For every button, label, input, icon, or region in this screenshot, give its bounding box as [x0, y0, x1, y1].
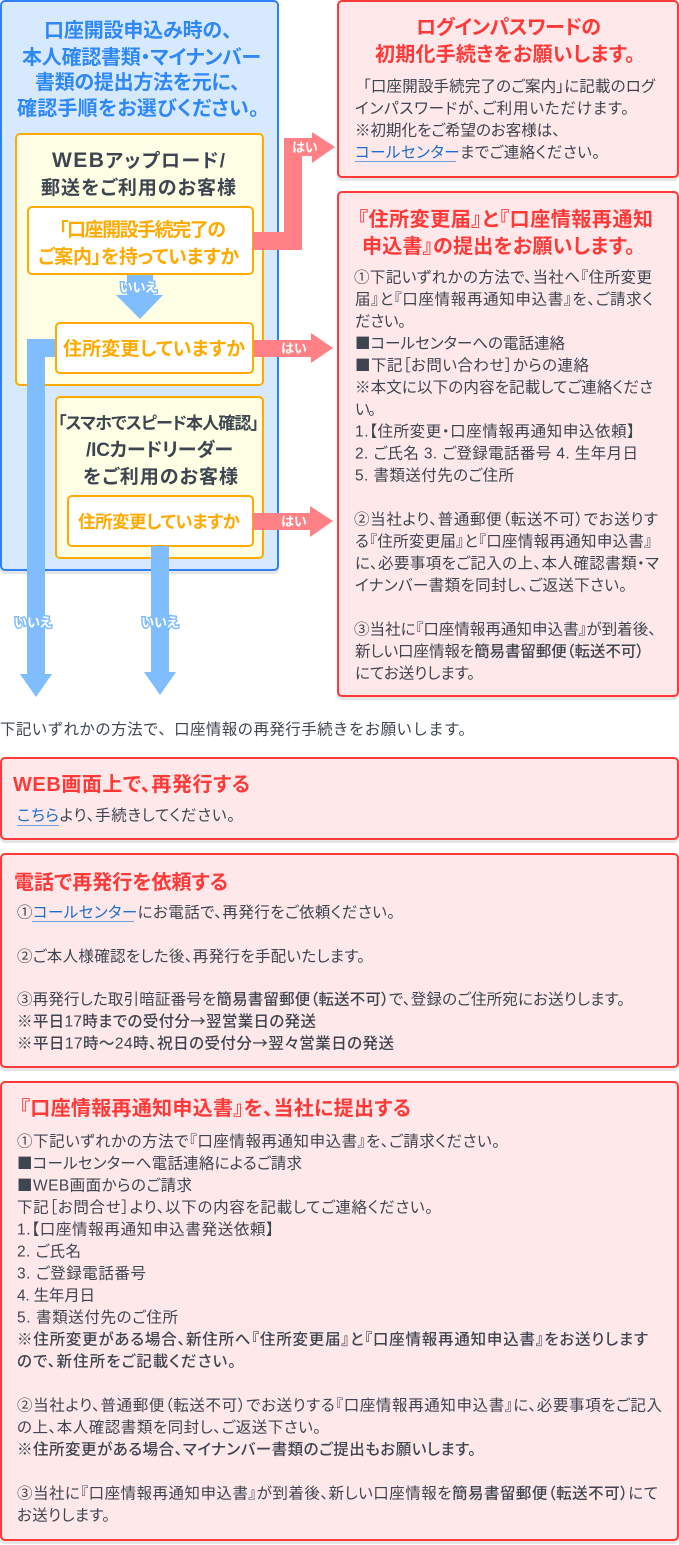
text: submit form steps: ※住所変更がある場合、新住所へ『住所変更届』と『口座情報再通知申込書』をお送りします — [17, 1330, 648, 1348]
heading: choose confirmation procedure: 本人確認書類・マイナンバー — [22, 46, 261, 69]
arrow: no, guide document to address question — [116, 275, 163, 319]
question: address changed, smartphone route: 住所変更していますか — [78, 512, 241, 532]
panel: submit form to company — [0, 1081, 679, 1541]
text: submit form steps: 1.【口座情報再通知申込書発送依頼】 — [17, 1220, 274, 1238]
text: address change form instructions: る『住所変更届』と『口座情報再通知申込書』 — [355, 532, 652, 550]
text: submit form steps: ②当社より、普通郵便（転送不可）でお送りする『口座情報再通知申込書』に、必要事項をご記入 — [17, 1396, 662, 1414]
text: reissue on web link: こちらより、手続きしてください。 — [17, 806, 235, 824]
heading: web upload or mail customers — [41, 149, 236, 199]
arrow: no, smartphone route down to reissue — [141, 546, 179, 695]
text: submit form steps — [17, 1132, 662, 1524]
text: address change form instructions: イナンバー書類を同封し、ご返送下さい。 — [355, 576, 627, 594]
text: reissue by phone steps: ③再発行した取引暗証番号を簡易書留郵便（転送不可）で、登録のご住所宛にお送りします。 — [17, 990, 625, 1008]
heading: address change form request: 『住所変更届』と『口座情報再通知 — [358, 208, 653, 231]
text: submit form steps: 4. 生年月日 — [17, 1286, 95, 1304]
text: address change form instructions: ■コールセンターへの電話連絡 — [355, 332, 565, 354]
arrow: no, address question down to reissue: いいえ — [14, 615, 52, 630]
question: address changed, web route: 住所変更していますか — [63, 338, 245, 360]
panel: confirmation procedure selection — [0, 0, 279, 571]
text: login password reset instructions: 「口座開設手続完了のご案内」に記載のログ — [363, 78, 656, 96]
arrow: yes, to login password reset — [253, 132, 335, 250]
text: address change form instructions: ■下記［お問い合わせ］からの連絡 — [355, 354, 589, 376]
arrow: yes, to address change form — [253, 333, 333, 363]
heading: web upload or mail customers: WEBアップロード/ — [52, 149, 226, 172]
question: do you have the guide document: ご案内」を持っていますか — [38, 245, 239, 268]
text: reissue by phone steps — [17, 904, 625, 1054]
text: submit form steps: ③当社に『口座情報再通知申込書』が到着後、新しい口座情報を簡易書留郵便（転送不可）にて — [17, 1484, 658, 1502]
arrow: no, guide document to address question: いいえ — [120, 280, 157, 295]
text: submit form steps: ■コールセンターへ電話連絡によるご請求 — [17, 1152, 302, 1174]
heading: choose confirmation procedure: 確認手順をお選びください。 — [17, 97, 259, 120]
text: submit form steps: 5. 書類送付先のご住所 — [17, 1308, 178, 1326]
text: reissue by phone steps: ※平日17時～24時、祝日の受付分→翌々営業日の発送 — [17, 1032, 394, 1054]
panel: login password reset — [337, 0, 679, 178]
text: submit form steps: 下記［お問合せ］より、以下の内容を記載してご連絡ください。 — [17, 1198, 433, 1216]
heading: reissue by phone: 電話で再発行を依頼する — [14, 871, 228, 894]
text: login password reset instructions: ※初期化をご希望のお客様は、 — [355, 122, 560, 140]
text: address change form instructions — [354, 268, 659, 682]
arrow: no, address question down to reissue — [14, 339, 57, 697]
text: submit form steps: 3. ご登録電話番号 — [17, 1264, 146, 1282]
arrow: yes, smartphone route to address change form — [253, 506, 333, 537]
panel: address change form request — [337, 191, 679, 697]
text: address change form instructions: い。 — [355, 402, 376, 418]
text: address change form instructions: 5. 書類送付先のご住所 — [355, 466, 514, 484]
arrow: yes, to address change form: はい — [281, 341, 307, 356]
heading: choose confirmation procedure: 口座開設申込み時の、 — [44, 19, 232, 42]
text: login password reset instructions — [355, 78, 656, 162]
panel: smartphone or IC card customers — [55, 396, 264, 559]
heading: login password reset — [375, 15, 635, 66]
arrow: yes, to login password reset: はい — [292, 140, 318, 155]
heading: reissue on web: WEB画面上で、再発行する — [13, 773, 250, 796]
text: address change form instructions: ださい。 — [355, 312, 406, 330]
text: submit form steps: ■WEB画面からのご請求 — [17, 1174, 192, 1196]
question box: address changed, smartphone route — [67, 495, 254, 547]
heading: choose confirmation procedure: 書類の提出方法を元に、 — [35, 71, 240, 94]
text: address change form instructions: ③当社に『口座情報再通知申込書』が到着後、 — [354, 620, 656, 638]
text: reissue by phone steps: ②ご本人様確認をした後、再発行を手配いたします。 — [17, 948, 365, 966]
question box: do you have the guide document — [27, 206, 254, 275]
heading: smartphone or IC card customers: をご利用のお客様 — [83, 465, 238, 488]
text: submit form steps: ので、新住所をご記載ください。 — [17, 1352, 236, 1370]
panel: reissue by phone — [0, 853, 679, 1068]
question: do you have the guide document — [38, 219, 239, 268]
text: submit form steps: ※住所変更がある場合、マイナンバー書類のご提出もお願いします。 — [17, 1440, 476, 1458]
heading: smartphone or IC card customers: /ICカードリーダー — [86, 438, 233, 461]
arrow: yes, smartphone route to address change form: はい — [281, 514, 307, 529]
panel: web upload or mail customers — [15, 133, 264, 386]
arrow: no, smartphone route down to reissue: いいえ — [141, 615, 179, 630]
text: address change form instructions: 1.【住所変更・口座情報再通知申込依頼】 — [355, 422, 635, 440]
heading: choose confirmation procedure — [17, 19, 261, 120]
text: submit form steps: お送りします。 — [17, 1506, 110, 1524]
text: submit form steps: の上、本人確認書類を同封し、ご返送下さい。 — [17, 1418, 321, 1436]
text: login password reset instructions: コールセンターまでご連絡ください。 — [355, 144, 600, 162]
text: submit form steps: ①下記いずれかの方法で『口座情報再通知申込書』を、ご請求ください。 — [17, 1132, 500, 1150]
heading: login password reset: 初期化手続きをお願いします。 — [375, 43, 635, 66]
panel: reissue on web — [0, 757, 679, 840]
text: address change form instructions: 2. ご氏名 3. ご登録電話番号 4. 生年月日 — [355, 444, 638, 462]
heading: smartphone or IC card customers — [58, 414, 259, 488]
text: address change form instructions: に、必要事項をご記入の上、本人確認書類・マ — [355, 554, 659, 572]
text: reissue by phone steps: ①コールセンターにお電話で、再発行をご依頼ください。 — [17, 904, 395, 922]
text: reissue by phone steps: ※平日17時までの受付分→翌営業日の発送 — [17, 1010, 316, 1032]
question: do you have the guide document: 「口座開設手続完了の — [59, 219, 226, 241]
heading: address change form request: 申込書』の提出をお願いします。 — [362, 235, 635, 258]
heading: web upload or mail customers: 郵送をご利用のお客様 — [41, 176, 236, 199]
text: login password reset instructions: インパスワードが、ご利用いただけます。 — [355, 100, 629, 118]
text: address change form instructions: 届』と『口座情報再通知申込書』を、ご請求く — [355, 290, 653, 308]
text: address change form instructions: ※本文に以下の内容を記載してご連絡くださ — [355, 378, 653, 396]
question box: address changed, web route — [55, 322, 254, 374]
heading: address change form request — [358, 208, 653, 258]
text: address change form instructions: ②当社より、普通郵便（転送不可）でお送りす — [354, 510, 658, 528]
text: address change form instructions: 新しい口座情報を簡易書留郵便（転送不可） — [355, 642, 644, 660]
heading: smartphone or IC card customers: 「スマホでスピード本人確認」 — [58, 414, 259, 433]
text: reissue intro: 下記いずれかの方法で、口座情報の再発行手続きをお願いします。 — [0, 720, 474, 738]
text: submit form steps: 2. ご氏名 — [17, 1242, 81, 1260]
heading: submit form to company: 『口座情報再通知申込書』を、当社に提出する — [20, 1097, 411, 1120]
heading: login password reset: ログインパスワードの — [416, 15, 601, 39]
text: address change form instructions: にてお送りします。 — [355, 664, 475, 682]
text: address change form instructions: ①下記いずれかの方法で、当社へ『住所変更 — [354, 268, 652, 286]
